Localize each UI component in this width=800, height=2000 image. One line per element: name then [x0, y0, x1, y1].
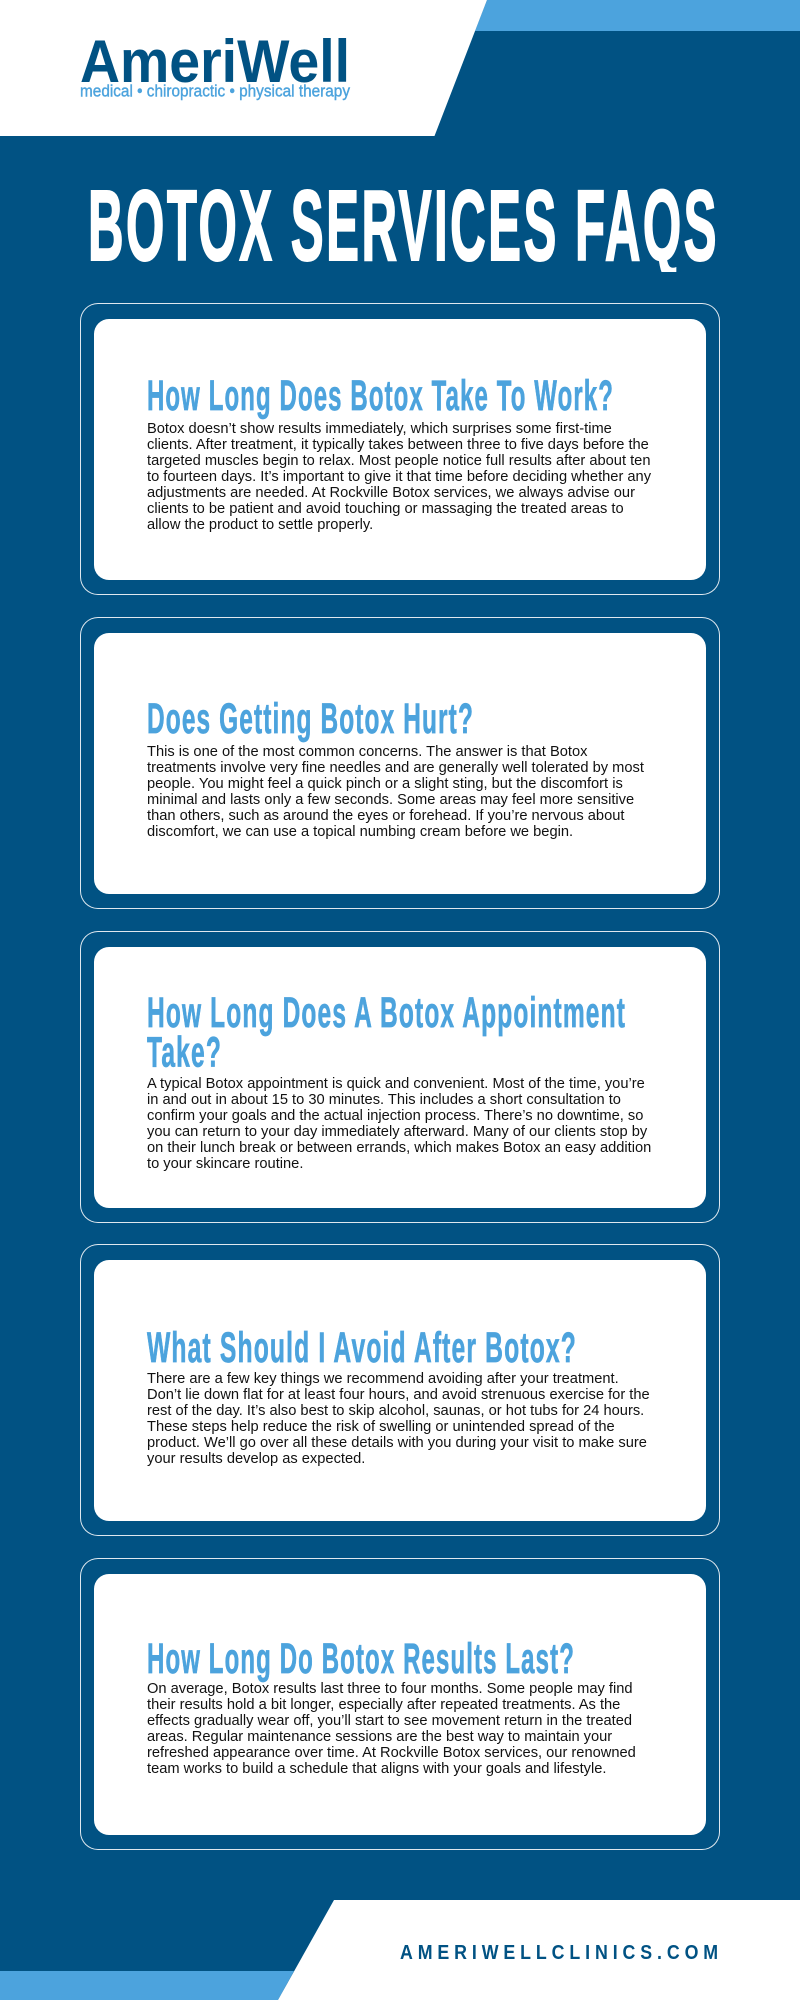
body text: you can return to your day immediately afterward. Many of our clients stop by	[147, 1124, 647, 1140]
body text: your results develop as expected.	[147, 1451, 365, 1467]
body text: team works to build a schedule that aligns with your goals and lifestyle.	[147, 1761, 606, 1777]
body text: minimal and lasts only a few seconds. Some areas may feel more sensitive	[147, 792, 634, 808]
heading	[147, 989, 626, 1076]
body text: discomfort, we can use a topical numbing cream before we begin.	[147, 824, 573, 840]
panel: does getting Botox hurt	[80, 616, 720, 908]
body text: targeted muscles begin to relax. Most people notice full results after about ten	[147, 452, 650, 468]
panel: how long do Botox results last	[80, 1558, 720, 1850]
body text	[147, 1076, 651, 1172]
body text: These steps help reduce the risk of swelling or unintended spread of the	[147, 1419, 615, 1435]
white card	[94, 946, 706, 1208]
body text: Don’t lie down flat for at least four hours, and avoid strenuous exercise for the	[147, 1387, 650, 1403]
white card	[94, 632, 706, 894]
body text: effects gradually wear off, you’ll start to see movement return in the treated	[147, 1713, 632, 1729]
body text: to your skincare routine.	[147, 1156, 303, 1172]
body text: On average, Botox results last three to four months. Some people may find	[147, 1681, 633, 1697]
header white banner	[0, 0, 487, 136]
panel: what should I avoid after Botox	[80, 1244, 720, 1536]
body text: clients to be patient and avoid touching or massaging the treated areas to	[147, 500, 624, 516]
body text	[147, 420, 651, 532]
body text	[147, 1681, 636, 1777]
header light blue strip	[475, 0, 800, 31]
body text	[147, 1371, 650, 1467]
body text: confirm your goals and the actual injection process. There’s no downtime, so	[147, 1108, 643, 1124]
body text: in and out in about 15 to 30 minutes. This includes a short consultation to	[147, 1092, 621, 1108]
body text: There are a few key things we recommend avoiding after your treatment.	[147, 1371, 619, 1387]
body text: treatments involve very fine needles and are generally well tolerated by most	[147, 760, 644, 776]
body text: adjustments are needed. At Rockville Botox services, we always advise our	[147, 484, 635, 500]
white card	[94, 319, 706, 580]
footer light blue strip	[0, 1971, 294, 2000]
body text: refreshed appearance over time. At Rockville Botox services, our renowned	[147, 1745, 636, 1761]
body text: product. We’ll go over all these details with you during your visit to make sure	[147, 1435, 647, 1451]
panel: how long does Botox take to work	[80, 303, 720, 595]
heading: Take?	[147, 1028, 222, 1076]
body text: A typical Botox appointment is quick and convenient. Most of the time, you’re	[147, 1076, 645, 1092]
body text: allow the product to settle properly.	[147, 516, 373, 532]
body text: Botox doesn’t show results immediately, which surprises some first-time	[147, 420, 612, 436]
body text: people. You might feel a quick pinch or a slight sting, but the discomfort is	[147, 776, 623, 792]
body text: areas. Regular maintenance sessions are the best way to maintain your	[147, 1729, 612, 1745]
body text: clients. After treatment, it typically takes between three to five days before the	[147, 436, 649, 452]
white card	[94, 1574, 706, 1834]
footer white banner	[278, 1900, 800, 2000]
body text: to fourteen days. It’s important to give it that time before deciding whether any	[147, 468, 651, 484]
body text: on their lunch break or between errands, which makes Botox an easy addition	[147, 1140, 651, 1156]
body text	[147, 744, 644, 840]
heading: Does Getting Botox Hurt?	[147, 695, 474, 743]
body text: This is one of the most common concerns. The answer is that Botox	[147, 744, 587, 760]
logo: AmeriWell	[80, 34, 350, 100]
body text: rest of the day. It’s also best to skip alcohol, saunas, or hot tubs for 24 hours.	[147, 1403, 644, 1419]
panel: how long does a Botox appointment take	[80, 930, 720, 1222]
body text: than others, such as around the eyes or forehead. If you’re nervous about	[147, 808, 624, 824]
white card	[94, 1260, 706, 1521]
body text: their results hold a bit longer, especially after repeated treatments. As the	[147, 1697, 620, 1713]
